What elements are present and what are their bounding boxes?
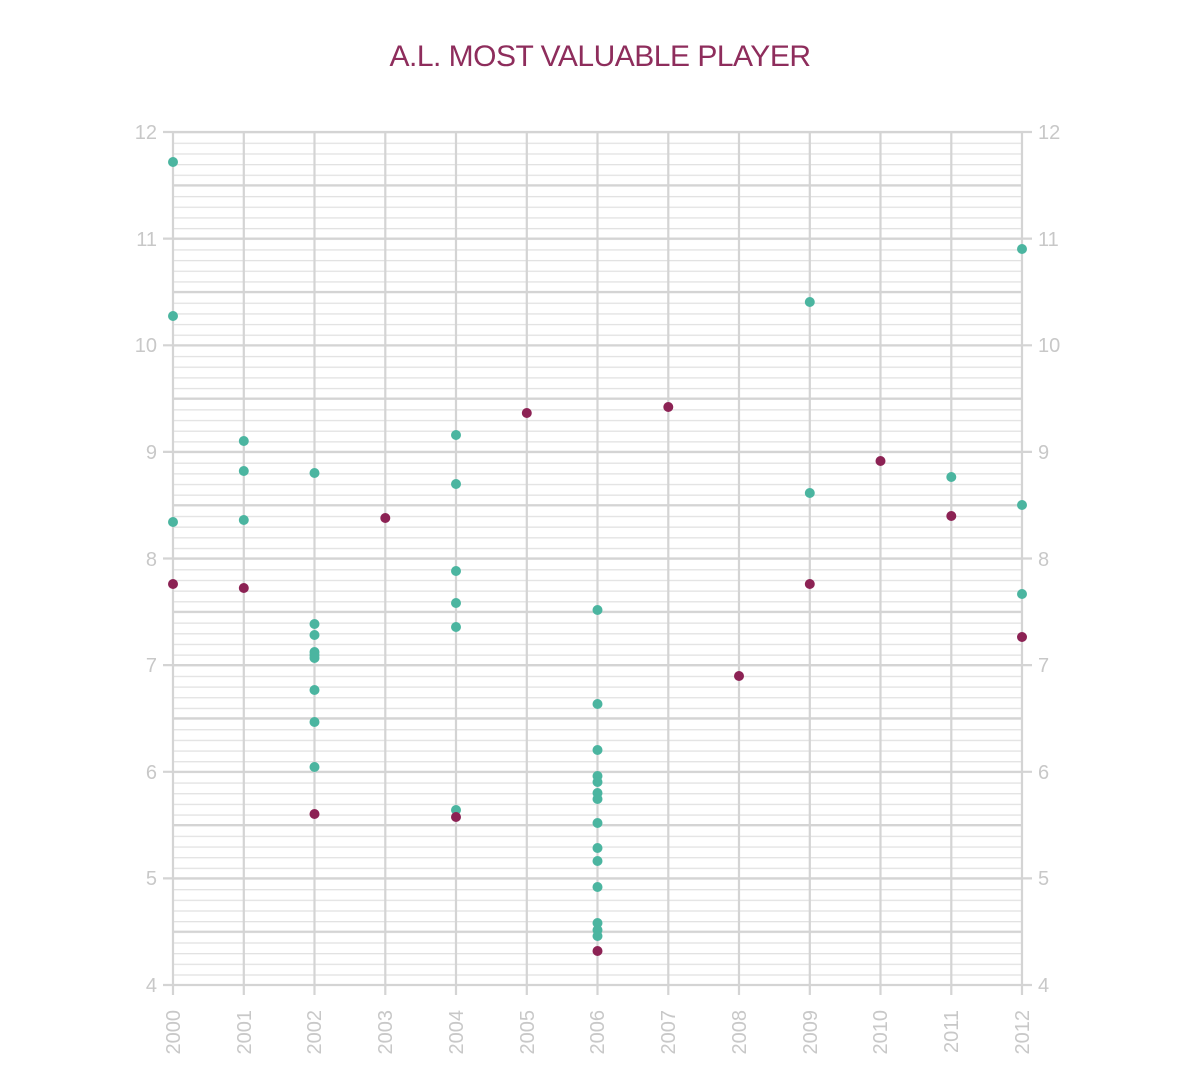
left axis labels: 5 [146, 868, 157, 890]
year labels: 2010 [870, 1010, 892, 1054]
year labels: 2011 [941, 1010, 963, 1053]
left axis labels: 4 [146, 975, 157, 997]
year labels: 2004 [446, 1010, 468, 1054]
maroon dots [168, 402, 1027, 956]
left axis labels: 12 [135, 122, 157, 144]
year labels: 2012 [1012, 1010, 1034, 1054]
right axis labels: 9 [1038, 442, 1049, 464]
left axis labels: 7 [146, 655, 157, 677]
right axis labels: 4 [1038, 975, 1049, 997]
year labels [163, 1010, 1034, 1054]
right axis labels: 5 [1038, 868, 1049, 890]
left axis labels: 10 [135, 335, 157, 357]
year labels: 2003 [375, 1010, 397, 1054]
chart [135, 122, 1060, 1054]
left axis labels: 8 [146, 549, 157, 571]
right axis labels: 10 [1038, 335, 1060, 357]
year labels: 2001 [234, 1010, 256, 1054]
left axis labels: 6 [146, 762, 157, 784]
year labels: 2008 [729, 1010, 751, 1054]
left axis labels [135, 122, 157, 997]
year labels: 2002 [304, 1010, 326, 1054]
left axis labels: 11 [136, 229, 157, 251]
year labels: 2009 [800, 1010, 822, 1054]
left axis labels: 9 [146, 442, 157, 464]
year labels: 2006 [587, 1010, 609, 1054]
right axis labels: 7 [1038, 655, 1049, 677]
title: A.L. MOST VALUABLE PLAYER [389, 40, 811, 73]
year labels: 2007 [658, 1010, 680, 1054]
right axis labels: 12 [1038, 122, 1060, 144]
year labels: 2005 [517, 1010, 539, 1054]
right axis labels: 6 [1038, 762, 1049, 784]
right axis labels [1038, 122, 1060, 997]
right axis labels: 11 [1038, 229, 1059, 251]
teal dots [168, 157, 1027, 941]
right axis labels: 8 [1038, 549, 1049, 571]
year labels: 2000 [163, 1010, 185, 1054]
